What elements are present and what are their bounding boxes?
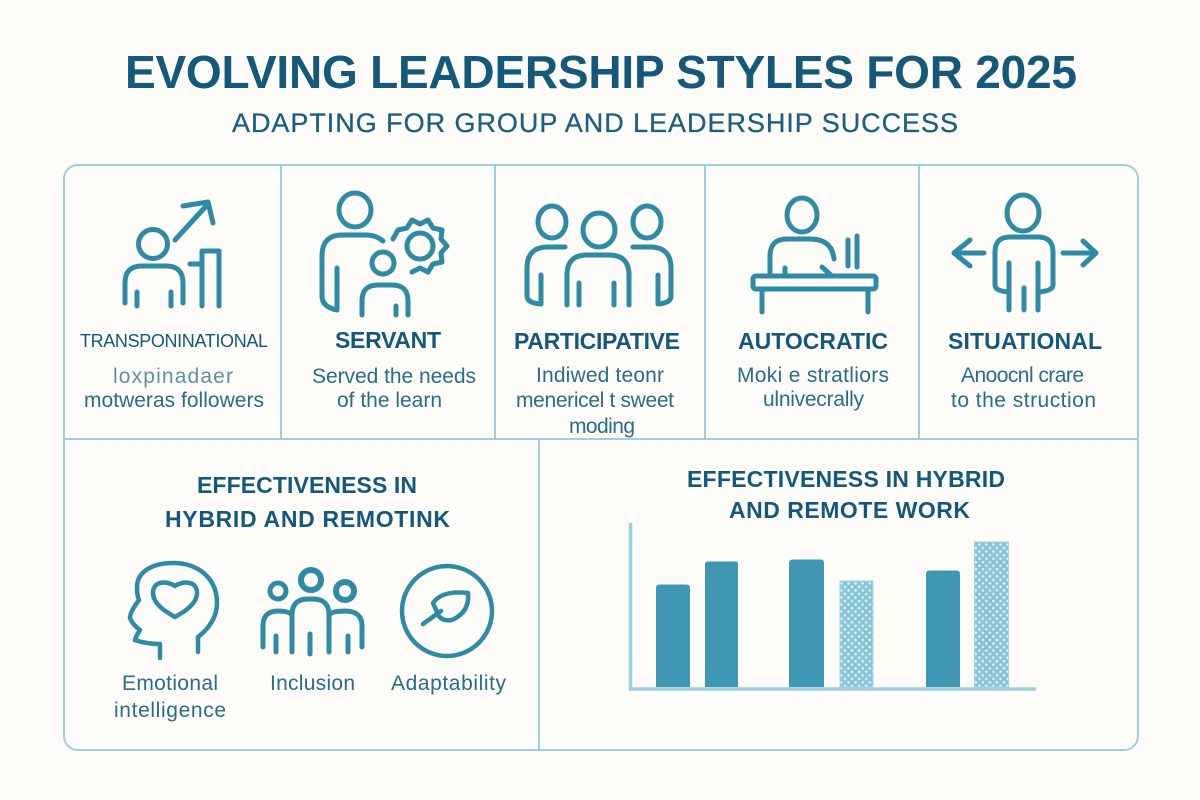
description: situational: [951, 364, 1096, 412]
description: participative: moding: [569, 415, 635, 438]
description: servant: Served the needs: [312, 365, 476, 388]
icon: three people: [527, 206, 671, 305]
description: servant: [312, 365, 476, 412]
icon: person with rising arrow and bar: [125, 202, 219, 306]
heading: participative: PARTICIPATIVE: [514, 328, 680, 354]
panel: effectiveness chart: [629, 466, 1036, 690]
description: participative: [516, 364, 674, 438]
heading: competencies: [165, 472, 450, 532]
heading: competencies: HYBRID AND REMOTINK: [165, 506, 450, 532]
label: emotional intelligence: [114, 672, 226, 722]
bar chart: [629, 523, 1036, 690]
heading: autocratic: AUTOCRATIC: [738, 328, 888, 354]
icon: servant leader with child and gear: [322, 193, 447, 315]
icon: person with two arrows: [954, 195, 1096, 310]
panel: participative: [514, 206, 680, 438]
panel: autocratic: [737, 198, 889, 411]
description: autocratic: Moki e stratliors: [737, 364, 889, 387]
label: adaptability: Adaptability: [391, 672, 506, 695]
icon: person at desk: [753, 198, 876, 312]
description: servant: of the learn: [337, 389, 442, 412]
description: participative: Indiwed teonr: [536, 364, 664, 387]
description: autocratic: [737, 364, 889, 411]
icon: adaptability: [402, 566, 492, 656]
heading: chart: EFFECTIVENESS IN HYBRID: [687, 466, 1005, 492]
subtitle: ADAPTING FOR GROUP AND LEADERSHIP SUCCESS: [232, 108, 958, 138]
description: transformational: loxpinadaer: [113, 365, 233, 388]
label: emotional intelligence: intelligence: [114, 699, 226, 722]
heading: chart: [687, 466, 1005, 523]
icon: head with heart: [130, 563, 217, 658]
heading: servant: SERVANT: [335, 327, 441, 353]
label: inclusion: Inclusion: [270, 672, 355, 695]
icon: group inclusion: [263, 570, 362, 654]
heading: competencies: EFFECTIVENESS IN: [197, 472, 417, 498]
panel: main frame: [64, 165, 1138, 750]
heading: situational: SITUATIONAL: [948, 328, 1102, 354]
heading: transformational: TRANSPONINATIONAL: [80, 331, 268, 351]
heading: chart: AND REMOTE WORK: [729, 497, 970, 523]
description: situational: to the struction: [951, 389, 1096, 412]
description: situational: Anoocnl crare: [961, 364, 1084, 387]
description: autocratic: ulnivecrally: [763, 388, 864, 411]
description: transformational: motweras followers: [84, 389, 264, 412]
panel: transformational: [80, 202, 268, 412]
description: transformational: [84, 365, 264, 412]
title: EVOLVING LEADERSHIP STYLES FOR 2025: [125, 46, 1077, 98]
label: emotional intelligence: Emotional: [122, 672, 218, 695]
panel: servant: [312, 193, 476, 412]
description: participative: menericel t sweet: [516, 389, 674, 412]
panel: key competencies: [114, 472, 506, 722]
panel: situational: [948, 195, 1102, 412]
